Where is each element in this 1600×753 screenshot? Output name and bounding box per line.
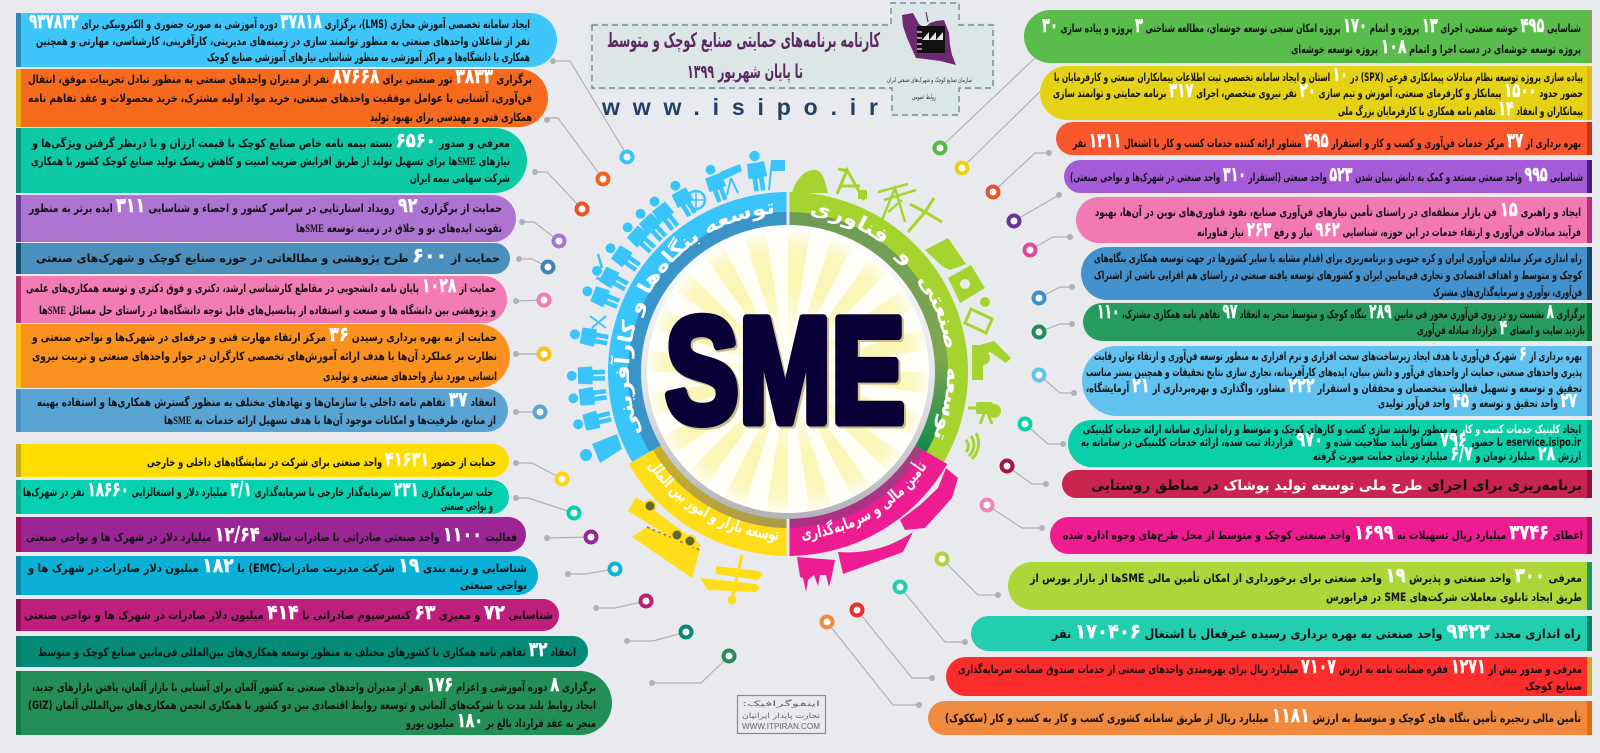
panel: left bar 4: تقویت ایده‌های نو و خلاق در زمینه توسعه SMEها [296, 221, 502, 236]
panel: left bar 11: فعالیت ۱۱۰۰ واحد صنعتی صادراتی با صادرات سالانه ۱۲/۶۴ میلیارد دلار در شهرک ها و نواحی صنعتی [26, 522, 517, 546]
panel: left bar 12: شناسایی و رتبه بندی ۱۹ شرکت مدیریت صادرات(EMC) با ۱۸۲ میلیون دلار صادرات در شهرک ها و [27, 553, 527, 577]
icon: sun [980, 297, 990, 307]
credit: line 1: اینفوگرافیک: [742, 699, 820, 708]
panel: left bar 3 [16, 128, 527, 193]
icon: miner [567, 366, 605, 385]
icon: worker in hardhat [580, 434, 622, 463]
icon: skyline [797, 557, 835, 592]
panel: right bar 2 [1040, 62, 1592, 120]
panel: right bar 13: راه اندازی مجدد ۹۴۲۲ واحد صنعتی به بهره برداری رسیده غیرفعال با اشتغال ۱۷۰۴۰۶ نفر [1051, 619, 1581, 643]
connector: bar 2 [544, 117, 608, 184]
connector: right bar 12 [936, 554, 1001, 598]
panel: left bar 10: و نواحی صنعتی [441, 499, 493, 514]
panel: right bar 6 [1081, 247, 1592, 300]
panel: left bar 8 [16, 387, 508, 432]
connector: bar 12 [565, 564, 620, 577]
connector: right bar 13 [894, 582, 968, 645]
panel: right bar 8: ۲۷ واحد تحقیق و توسعه و ۴۵ واحد فن‌آور تولیدی [1378, 388, 1577, 412]
connector: bar 4 [519, 219, 564, 246]
website: www.isipo.ir [601, 94, 878, 120]
logo caption: سازمان صنایع کوچک و شهرک‌های صنعتی ایران [887, 76, 972, 84]
icon: chef [571, 408, 613, 434]
panel: left bar 7: انسانی مورد نیاز واحدهای صنعتی و تولیدی [323, 369, 497, 384]
panel: left bar 7: نظارت بر عملکرد آن‌ها با هدف ارائه آموزش‌های تخصصی کارگران در جوار واحدهای صنعتی و تربیت نیروی [32, 349, 497, 364]
segment: green [790, 192, 968, 462]
connector: bar 13 [593, 596, 652, 611]
panel: left bar 4: حمایت از برگزاری ۹۲ رویداد استارتاپی در سراسر کشور و احصاء و شناسایی ۳۱۱ ایده برتر به منظور [28, 193, 502, 217]
panel: right bar 9 [1068, 420, 1592, 467]
title line 2: تا پایان شهریور ۱۳۹۹ [687, 61, 803, 83]
connector: right bar 14 [852, 604, 935, 681]
connector: right bar 6 [1034, 284, 1075, 304]
segment: blue [608, 192, 786, 462]
connector: bar 1 [550, 58, 632, 162]
connector: right bar 1 [934, 58, 1035, 154]
icon: robot arm [972, 341, 1011, 380]
panel: left bar 6: و پژوهشی بین دانشگاه ها و صنعت و استفاده از پتانسیل‌های قابل توجه دانشگاه‌ها در راستای حل مسائل SMEها [39, 303, 496, 318]
icon: person arms raised [588, 254, 631, 294]
connector: bar 6 [513, 294, 550, 306]
panel: left bar 2: فن‌آوری، آشنایی با عوامل موفقیت واحدهای صنعتی، خرید مواد اولیه مشترک، خرید محصولات و عقد تفاهم نامه [28, 91, 532, 106]
icon: telescope operator [700, 162, 742, 204]
panel: left bar 12 [16, 553, 538, 595]
panel: right bar 1: شناسایی ۴۹۵ خوشه صنعتی، اجرای ۱۳ پروژه و اتمام ۱۷۰ پروژه امکان سنجی توسعه خوشه‌ای، مطالعه شناختی ۳ پروژه و پیاده سازی ۳۰ [1042, 13, 1581, 37]
panel: left bar 7 [16, 322, 510, 388]
connector: right bar 15 [822, 616, 922, 708]
panel: left bar 5: حمایت از ۶۰۰ طرح پژوهشی و مطالعاتی در حوزه صنایع کوچک و شهرک‌های صنعتی [36, 243, 500, 267]
connector: right bar 4 [1008, 192, 1062, 226]
connector: bar 15 [649, 650, 734, 686]
panel: right bar 2: حضور حدود ۱۵۰۰ پیمانکار و کارفرمای صنعتی، آموزش و تیم سازی ۲۰ نفر نیروی متخصص، اجرای ۳۱۷ برنامه حمایتی و توانمند سازی [1053, 78, 1583, 102]
connector: bar 3 [532, 169, 588, 214]
connector: bar 5 [516, 256, 554, 272]
panel: right bar 1 [1024, 10, 1592, 63]
icons: yellow segment [628, 497, 763, 604]
credit: line 2: تجارت پایدار ایرانیان [742, 711, 820, 720]
icon: wifi [966, 433, 979, 459]
connectors: right column [822, 58, 1077, 708]
icon: signpost [700, 555, 763, 604]
panel: left bar 9 [16, 444, 509, 477]
icon: astronaut with flag [744, 149, 785, 192]
panel: right bar 9: eservice.isipo.ir با حضور ۷۹۶ مشاور تأیید صلاحیت شده و ۹۷۰ قرارداد ثبت شده، ارائه خدمات کلینیکی در سامانه به [1081, 427, 1581, 451]
icon: singer [567, 385, 607, 408]
panel: left bar 1 [16, 9, 557, 67]
connector: right bar 10 [1002, 460, 1049, 487]
panel: left bar 10: جلب سرمایه‌گذاری ۲۳۱ سرمایه‌گذار خارجی با سرمایه‌گذاری ۳/۱ میلیارد دلار و اشتغالزایی ۱۸۶۶۰ نفر در شهرک‌ها [23, 477, 493, 501]
panel: right bar 11: اعطای ۳۷۴۶ میلیارد ریال تسهیلات به ۱۶۹۹ واحد صنعتی کوچک و متوسط از محل طرح‌های وجوه اداره شده [1063, 520, 1583, 544]
panel: right bar 5 [1076, 197, 1592, 243]
icon: Iran map logo [902, 12, 956, 65]
panel: right bar 3: بهره برداری از ۳۷ مرکز خدمات فن‌آوری و کسب و کار و استقرار ۴۹۵ مشاور ارائه کننده خدمات کسب و کار با اشتغال ۱۳۱۱ نفر [1072, 128, 1581, 152]
panel: left bar 8: از منابع، ظرفیت‌ها و امکانات موجود آن‌ها با هدف تسهیل ارائه خدمات به SMEها [164, 413, 496, 428]
panel: right bar 14 [946, 654, 1592, 696]
center sunburst [644, 228, 932, 516]
icon: truck on road [628, 497, 701, 578]
panel: left bar 2: برگزاری ۳۸۳۳ تور صنعتی برای ۸۷۶۶۸ نفر از مدیران واحدهای صنعتی به منظور تبادل تجربیات موفق، انتقال [28, 64, 532, 88]
connector: right bar 7 [1034, 321, 1075, 338]
icon: solar panel [965, 309, 992, 333]
panel: right bar 10: برنامه‌ریزی برای اجرای طرح ملی توسعه تولید پوشاک در مناطق روستایی [1091, 478, 1582, 494]
icon: person at desk [601, 238, 643, 275]
connector: right bar 5 [1024, 234, 1073, 256]
panel: right bar 12: معرفی ۳۰۰ واحد صنعتی و پذیرش ۱۹ واحد صنعتی برای برخورداری از امکان تأمین مالی SMEها از بازار بورس از [1029, 563, 1582, 587]
title line 1: کارنامه برنامه‌های حمایتی صنایع کوچک و متوسط [607, 28, 880, 53]
connector: right bar 2 [956, 72, 1060, 174]
icon: bridge [838, 532, 913, 574]
panel: left bar 1: همکاری با دانشگاه‌ها و مراکز آموزشی به منظور شناسایی نیازهای آموزشی صنایع کوچک [207, 50, 530, 65]
panel: left bar 14 [16, 636, 588, 667]
panel: left bar 11 [16, 517, 526, 552]
connector: right bar 8 [1034, 370, 1077, 396]
panel: right bar 9: ارزش ۲۸ میلیارد تومان و ۶/۷ میلیارد تومان حمایت صورت گرفته [1313, 441, 1581, 465]
panel: right bar 3 [1056, 122, 1592, 155]
panel: left bar 14: انعقاد ۳۲ تفاهم نامه همکاری با کشورهای مختلف به منظور توسعه همکاری‌های بین‌المللی فی‌مابین صنایع کوچک و متوسط [38, 637, 576, 661]
panel: left bar 2: همکاری فنی و مهندسی برای بهبود تولید [370, 110, 532, 125]
connector: bar 11 [544, 532, 596, 542]
panel: left bar 3: نیازهای SMEها برای تسهیل تولید از طریق افزایش ضریب امنیت و کاهش ریسک تولید صنایع کوچک کشور با همکاری [31, 154, 510, 169]
panel: right bar 14: صنایع کوچک [1525, 679, 1582, 694]
connector: bar 10 [513, 495, 580, 518]
panel: left bar 15 [16, 671, 612, 735]
icon: oil pump [837, 169, 867, 200]
panel: left bar 15: منجر به عقد قرارداد بالغ بر ۱۸۰ میلیون یورو [405, 708, 596, 732]
panel: right bar 8 [1082, 341, 1592, 416]
SME wordmark: SME [665, 286, 905, 454]
icon: mine [792, 170, 828, 193]
left column bars [16, 9, 612, 735]
connector: right bar 11 [982, 500, 1045, 531]
panel: left bar 6 [16, 273, 507, 323]
icon: factory [925, 238, 966, 270]
segment: pink [790, 446, 948, 556]
connector: bar 14 [624, 626, 692, 644]
panel: left bar 3: معرفی و صدور ۶۵۶۰ بسته بیمه نامه خاص صنایع کوچک با قیمت ارزان و با درنظر گرفتن ویژگی‌ها و [31, 128, 510, 152]
panel: left bar 8: انعقاد ۳۷ تفاهم نامه داخلی با سازمان‌ها و نهادهای مختلف به منظور گسترش همکاری‌ها و استفاده بهینه [37, 387, 496, 411]
icons: people around blue segment [567, 149, 785, 463]
panel: left bar 3: شرکت سهامی بیمه ایران [410, 171, 510, 185]
panel: right bar 11 [1050, 517, 1592, 554]
panel: left bar 7: حمایت از به بهره برداری رسیدن ۳۶ مرکز ارتقاء مهارت فنی و حرفه‌ای در شهرک‌ها و نواحی صنعتی و [31, 322, 497, 346]
panel: left bar 10 [16, 477, 509, 514]
connector: bar 7 [513, 348, 550, 360]
icon: robot [968, 402, 1001, 424]
panel: left bar 15: برگزاری ۸ دوره آموزشی و اعزام ۱۷۶ نفر از مدیران واحدهای صنعتی به کشور آلمان برای آشنایی با بازار آلمان، یافتن بازارهای جدید، [32, 672, 596, 696]
header: title panel [589, 2, 995, 120]
central wheel [608, 192, 968, 556]
connector: right bar 3 [988, 150, 1052, 198]
panel: left bar 15: ایجاد روابط بلند مدت با شرکت‌های آلمانی و توسعه روابط اقتصادی بین دو کشور با همکاری انجمن همکاری‌های بین‌المللی آلمان (GIZ) [28, 698, 596, 713]
panel: left bar 1: نفر از شاغلان واحدهای صنعتی به منظور توانمند سازی در زمینه‌های مدیریتی، کارآفرینی، کارشناسی، مهارتی و همچنین [36, 34, 530, 49]
label: green arc: توسعه صنعتی و فناوری [810, 208, 954, 440]
icon: wind turbines [908, 198, 942, 232]
connectors: left column [513, 58, 734, 686]
label: pink arc: تأمین مالی و سرمایه‌گذاری [802, 461, 926, 542]
panel: left bar 4 [16, 193, 516, 242]
icon: nuclear sign [948, 265, 985, 303]
icons: industry around green segment [792, 169, 1011, 459]
panel: left bar 2 [16, 64, 548, 127]
credit box [738, 696, 826, 734]
credit: line 3: WWW.ITPIRAN.COM [742, 722, 820, 731]
connector: right bar 9 [1020, 418, 1066, 447]
panel: right bar 12 [1008, 562, 1592, 610]
panel: left bar 12: نواحی صنعتی [460, 578, 527, 593]
panel: right bar 7 [1083, 299, 1592, 341]
icon: factory shapes [900, 468, 958, 530]
icon: person with globe [665, 177, 705, 219]
label: yellow arc: توسعه بازار و امور بین الملل [647, 463, 779, 543]
icon: power pylon [878, 184, 916, 222]
panel: right bar 15 [928, 701, 1592, 735]
SME wordmark: SME [667, 288, 907, 456]
panel: right bar 10 [1062, 470, 1592, 498]
icon: scientist with DNA [568, 316, 609, 349]
icons: pink segment [797, 468, 958, 592]
connector: bar 8 [513, 406, 546, 418]
icon: doctor [579, 281, 622, 312]
segment: yellow [628, 446, 786, 556]
connector: bar 9 [513, 460, 568, 484]
panel: right bar 13 [971, 616, 1592, 651]
panel: left bar 6: حمایت از ۱۰۲۸ پایان نامه دانشجویی در مقاطع کارشناسی ارشد، دکتری و فوق دکتری و توسعه همکاری‌های علمی [26, 273, 496, 297]
label: blue arc: توسعه بنگاه‌ها و کارآفرینی [610, 204, 774, 433]
panel: left bar 13: شناسایی ۷۲ و ممیزی ۶۳ کنسرسیوم صادراتی با ۴۱۴ میلیون دلار صادرات در شهرک ها و نواحی صنعتی [24, 600, 553, 624]
right column bars [928, 10, 1592, 735]
panel: left bar 9: حمایت از حضور ۴۱۶۳۱ واحد صنعتی برای شرکت در نمایشگاه‌های داخلی و خارجی [147, 447, 496, 471]
logo subcaption: روابط عمومی [912, 93, 936, 101]
panel: left bar 1: ایجاد سامانه تخصصی آموزش مجازی (LMS)، برگزاری ۳۷۸۱۸ دوره آموزشی به صورت حضوری و الکترونیکی برای ۹۳۷۸۳۲ [29, 9, 530, 33]
icon: group of people [618, 192, 682, 256]
